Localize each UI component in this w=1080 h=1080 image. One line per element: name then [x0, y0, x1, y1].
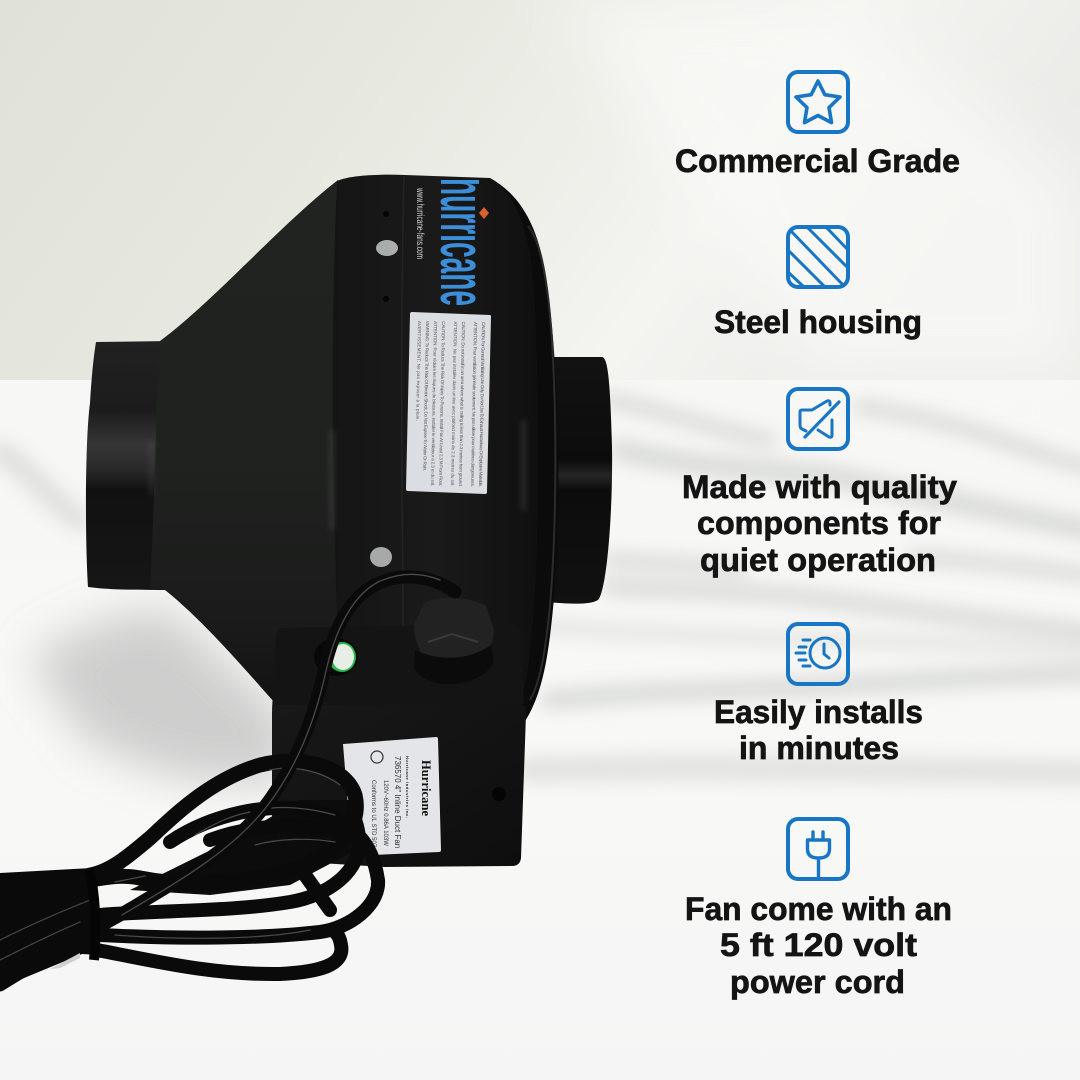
- power cord: [0, 574, 455, 988]
- box front face: [272, 704, 526, 867]
- central band: [333, 175, 538, 730]
- heading: [714, 694, 923, 766]
- fan: hurricane: [427, 178, 499, 306]
- box top face: [272, 624, 524, 710]
- warning label: WARNING: To Reduce The Risk Of Electric Shock, Do Not Expose To Water Or Rain.: [422, 321, 430, 471]
- warning label: CAUTION: To Reduce The Risk Of Injury To Persons, Install Fan At Least 2.3 M From Floor.: [438, 321, 446, 486]
- screw hole: [492, 787, 506, 801]
- icon: star: [788, 72, 848, 132]
- highlights on housing: [150, 420, 525, 530]
- rear motor bell: [480, 178, 558, 735]
- heading: Commercial Grade: [675, 143, 960, 179]
- rating label: 736570 4" Inline Duct Fan: [393, 756, 402, 848]
- main cord: [0, 577, 455, 985]
- icon: fast clock: [788, 624, 848, 684]
- junction box: [272, 598, 526, 867]
- warning label: CAUTION: Do not install in an area where what is ceiling is less than 2.3 metres from ground.: [458, 322, 466, 487]
- icon: muted speaker: [788, 389, 848, 449]
- band screw bottom: [370, 547, 392, 567]
- heading: power cord: [730, 964, 905, 1000]
- heading: in minutes: [739, 730, 899, 766]
- rating label: 120V~60Hz 0.86A 103W: [382, 780, 388, 846]
- website text: www.hurricane-fans.com: [414, 187, 425, 259]
- feature: power cord: [685, 819, 952, 1000]
- background: table surface: [0, 380, 1080, 1080]
- band rivet holes: [383, 211, 389, 302]
- shadow of the fan on the table: [30, 610, 290, 785]
- cord bundle to the left of the tie: [0, 868, 100, 988]
- heading: Steel housing: [714, 304, 922, 340]
- dense inner mass of cord loops: [130, 800, 356, 895]
- cord loops: [90, 761, 378, 974]
- heading: Easily installs: [714, 694, 923, 730]
- band screw top: [376, 240, 398, 256]
- rating label: Conforms to UL STD 507: [370, 780, 376, 848]
- main cord highlight: [122, 574, 440, 915]
- inlet collar: [86, 341, 170, 590]
- power indicator: [314, 638, 358, 676]
- heading: [682, 469, 957, 578]
- warning label: AVERTISSEMENT: Ne pas exposer à la pluie.: [415, 321, 422, 421]
- warning label: ATTENTION: Pour ventilation générale seulement. Ne pas utiliser pour matières dangereuses.: [470, 322, 478, 487]
- background: wall: [0, 0, 1080, 381]
- white tag on cord: [50, 953, 80, 969]
- warning label: ATTENTION: Ne pas installer dans un lieu avec plafond moins de 2.3 metres du sol.: [450, 321, 458, 487]
- outlet collar: [545, 357, 612, 604]
- cone housing: [150, 180, 345, 728]
- heading: components for: [697, 505, 941, 541]
- background: soft light and shadow streaks: [0, 0, 1080, 773]
- brand mark: [479, 207, 489, 219]
- warning label: CAUTION: For General Ventilating Use Only. Do Not Use To Exhaust Hazardous Or Explosive Materials.: [478, 322, 486, 487]
- icon: diagonal stripes: [788, 227, 848, 287]
- feature: easy install: [714, 624, 923, 766]
- warning label: [406, 312, 491, 494]
- heading: Made with quality: [682, 469, 957, 505]
- feature: commercial grade: [675, 72, 960, 179]
- cord binding: [89, 870, 95, 960]
- heading: [685, 891, 952, 1000]
- rating label: [343, 737, 441, 856]
- warning label: ATTENTION: Pour réduire les risques de blessure, installer le ventilateur à 2.3 m du sol.: [430, 321, 438, 486]
- cord highlights: [0, 768, 340, 960]
- heading: quiet operation: [700, 542, 936, 578]
- heading: Fan come with an: [685, 891, 952, 927]
- icon: plug: [788, 819, 848, 879]
- cable gland: [414, 598, 494, 684]
- rating label: Hurricane: [419, 760, 433, 816]
- feature: quiet operation: [682, 389, 957, 578]
- feature: steel housing: [714, 227, 922, 340]
- rating label: Hurricane Industries Inc.: [405, 756, 410, 818]
- fan: [86, 175, 612, 735]
- heading: 5 ft 120 volt: [720, 927, 917, 963]
